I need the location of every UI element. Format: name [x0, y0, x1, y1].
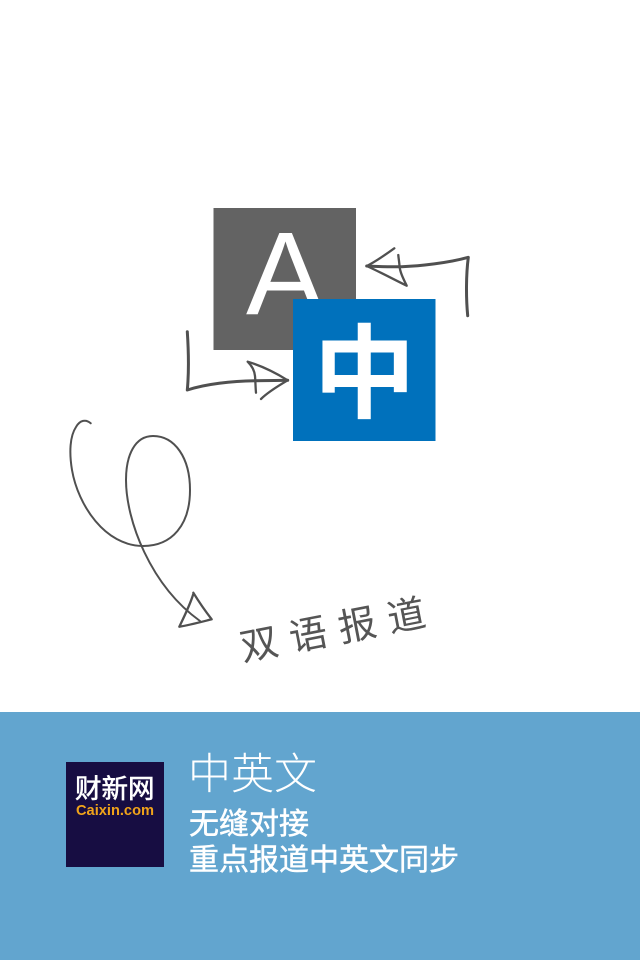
handwritten caption: 双语报道 [235, 580, 441, 672]
icon: English letter tile: A [246, 208, 325, 340]
icon: English letter tile [214, 208, 356, 350]
footer subheading: 无缝对接 [189, 808, 309, 841]
footer subheading: 重点报道中英文同步 [189, 844, 459, 877]
footer subheading [189, 808, 459, 877]
arrow: hand-drawn looping arrow toward caption [70, 421, 212, 627]
arrow: hand-drawn arrow pointing to A tile [367, 248, 468, 316]
logo: Caixin [66, 762, 164, 867]
arrow: hand-drawn arrow pointing to Chinese tile [187, 332, 288, 399]
logo: Caixin: 财新网 [75, 767, 154, 806]
icon: Chinese character tile: 中 [314, 293, 416, 440]
logo: Caixin: Caixin.com [76, 802, 154, 819]
footer band [0, 712, 640, 960]
footer heading: 中英文 [188, 740, 317, 802]
